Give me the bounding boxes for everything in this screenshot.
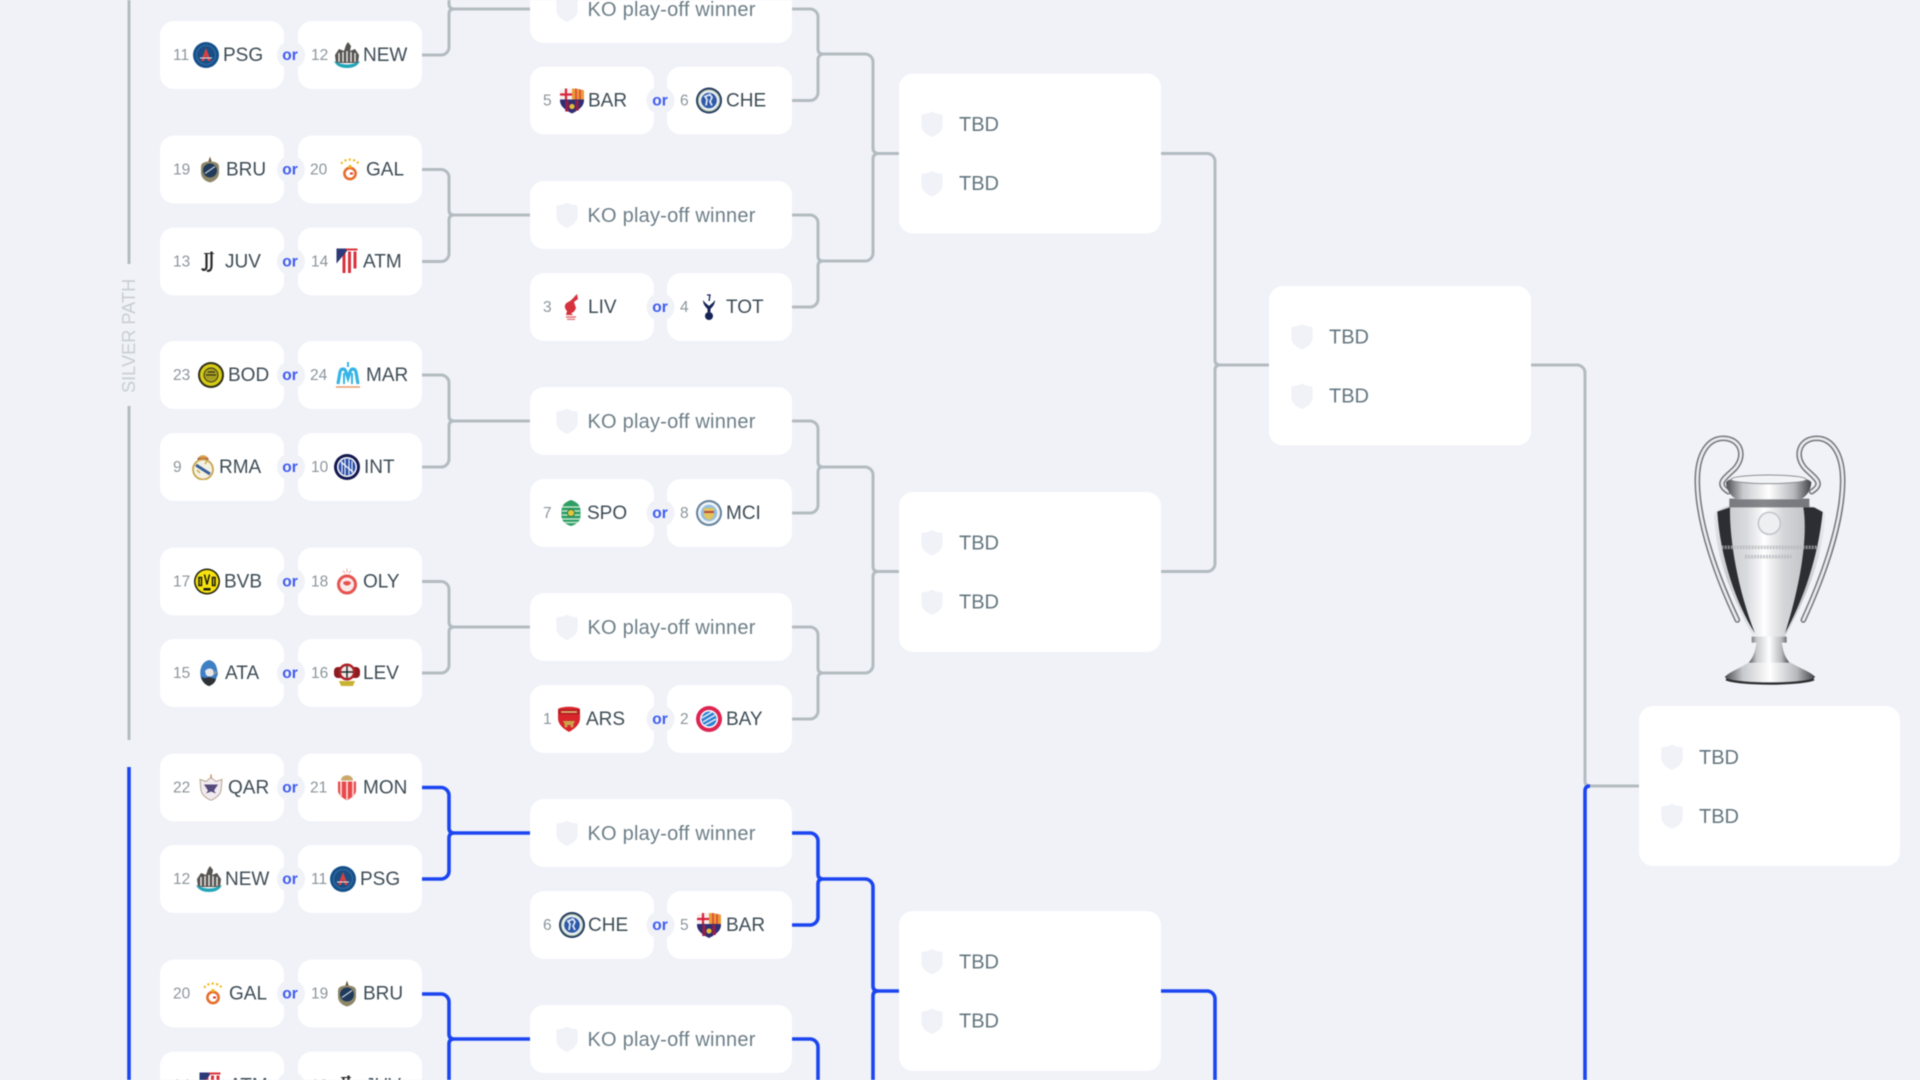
- icon: trophy: [1697, 438, 1843, 684]
- team: GAL: 20: [310, 162, 328, 178]
- team: QAR: QAR: [228, 778, 269, 798]
- team: ATM: [160, 1052, 284, 1080]
- team: MCI: [667, 479, 792, 547]
- team: NEW: 12: [173, 871, 190, 888]
- team: PSG: [298, 845, 422, 913]
- semi-final card: [1269, 286, 1531, 446]
- team: BAR: 5: [543, 92, 552, 110]
- team: MCI: MCI: [726, 503, 761, 524]
- team: BOD: [160, 341, 284, 409]
- team: BRU: [160, 136, 284, 204]
- or badge: [277, 156, 305, 184]
- play-off winner card 6: KO play-off winner: [588, 1029, 756, 1051]
- team: ATM: [298, 228, 422, 296]
- trophy bowl rim: [1726, 476, 1811, 499]
- team: PSG: [160, 21, 284, 89]
- or badge: or: [282, 986, 298, 1002]
- team: GAL: GAL: [366, 160, 404, 180]
- match: GAL or BRU: [160, 960, 422, 1028]
- match: BAR or CHE: [530, 66, 792, 134]
- team: QAR: 22: [173, 780, 190, 796]
- trophy neck: [1729, 499, 1809, 507]
- team: BAR: BAR: [588, 90, 627, 112]
- team: MON: 21: [310, 780, 327, 796]
- or badge: [277, 774, 305, 802]
- or badge: or: [282, 665, 298, 682]
- quarter-final card 1: [899, 74, 1161, 234]
- play-off winner card 5: [530, 799, 792, 867]
- or badge: [646, 499, 674, 527]
- connectors: gold path: [422, 786, 1590, 1080]
- team: CHE: 6: [680, 92, 689, 110]
- team: NEW: [298, 21, 422, 89]
- team: ATM: 14: [311, 254, 329, 270]
- team: BOD: BOD: [228, 365, 269, 386]
- team: OLY: OLY: [363, 572, 400, 592]
- match: QAR or MON: [160, 754, 422, 822]
- team: ATA: 15: [173, 665, 190, 682]
- or badge: or: [282, 871, 298, 888]
- team: BOD: 23: [173, 367, 190, 384]
- or badge: [277, 41, 305, 69]
- team: ARS: 1: [543, 711, 552, 728]
- team: LEV: [298, 639, 422, 707]
- match: ATM or JUV: [160, 1052, 422, 1080]
- play-off winner card 4: KO play-off winner: [588, 617, 756, 639]
- team: LIV: 3: [543, 299, 552, 316]
- team: PSG: PSG: [223, 45, 263, 66]
- trophy stem: [1748, 637, 1790, 663]
- final card: TBD: [1699, 806, 1739, 828]
- team: BRU: BRU: [226, 160, 266, 180]
- play-off winner card 2: [530, 181, 792, 249]
- trophy body: [1714, 499, 1825, 637]
- team: NEW: 12: [311, 47, 328, 64]
- team: GAL: [298, 136, 422, 204]
- match: SPO or MCI: [530, 479, 792, 547]
- team: BAR: [667, 891, 792, 959]
- team: BVB: [160, 548, 284, 616]
- or badge: or: [652, 711, 668, 728]
- team: JUV: [160, 228, 284, 296]
- team: MON: [298, 754, 422, 822]
- or badge: [646, 705, 674, 733]
- match: BVB or OLY: [160, 548, 422, 616]
- match: JUV or ATM: [160, 228, 422, 296]
- or badge: [277, 865, 305, 893]
- silver path label: SILVER PATH: [119, 279, 139, 393]
- trophy base: [1725, 663, 1815, 683]
- or badge: [646, 86, 674, 114]
- team: NEW: NEW: [225, 869, 269, 890]
- team: BAY: [667, 685, 792, 753]
- semi-final card: TBD: [1329, 326, 1369, 348]
- team: MAR: 24: [310, 367, 328, 384]
- team: NEW: NEW: [363, 45, 407, 66]
- team: INT: [298, 433, 422, 501]
- quarter-final card 2: [899, 492, 1161, 652]
- semi-final card: TBD: [1329, 386, 1369, 408]
- match: ARS or BAY: [530, 685, 792, 753]
- or badge: [277, 248, 305, 276]
- or badge: or: [282, 47, 298, 64]
- team: BRU: 19: [311, 986, 328, 1002]
- final card: [1639, 706, 1900, 866]
- team: BVB: BVB: [224, 572, 262, 592]
- play-off winner card 2: KO play-off winner: [588, 205, 756, 227]
- team: TOT: 4: [680, 299, 689, 316]
- match: ATA or LEV: [160, 639, 422, 707]
- or badge: or: [282, 780, 298, 796]
- or badge: or: [282, 162, 298, 178]
- or badge: or: [652, 505, 668, 522]
- team: SPO: SPO: [587, 503, 627, 524]
- or badge: or: [282, 574, 298, 590]
- play-off winner card 6: [530, 1005, 792, 1073]
- team: PSG: PSG: [360, 869, 400, 890]
- team: TOT: TOT: [726, 297, 764, 318]
- team: ATA: ATA: [225, 663, 259, 684]
- team: LIV: [530, 273, 654, 341]
- team: LIV: LIV: [588, 297, 617, 318]
- team: OLY: [298, 548, 422, 616]
- team: LEV: 16: [311, 665, 328, 682]
- team: JUV: [298, 1052, 422, 1080]
- team: MCI: 8: [680, 505, 689, 522]
- quarter-final card 2: TBD: [959, 532, 999, 554]
- or badge: or: [282, 254, 298, 270]
- quarter-final card 3: [899, 911, 1161, 1071]
- team: QAR: [160, 754, 284, 822]
- or badge: or: [652, 917, 668, 934]
- quarter-final card 1: TBD: [959, 173, 999, 195]
- team: ATM: ATM: [363, 252, 402, 272]
- match: RMA or INT: [160, 433, 422, 501]
- or badge: [277, 568, 305, 596]
- team: BAR: 5: [680, 917, 689, 934]
- or badge: [646, 911, 674, 939]
- or badge: [277, 1072, 305, 1080]
- team: RMA: [160, 433, 284, 501]
- or badge: or: [652, 299, 668, 316]
- team: MON: MON: [363, 778, 407, 798]
- team: ARS: ARS: [586, 709, 625, 730]
- trophy medallion: [1758, 512, 1780, 534]
- team: NEW: [160, 845, 284, 913]
- team: MAR: MAR: [366, 365, 408, 386]
- match: NEW or PSG: [160, 845, 422, 913]
- team: RMA: RMA: [219, 457, 262, 478]
- team: OLY: 18: [311, 574, 328, 590]
- team: MAR: [298, 341, 422, 409]
- or badge: [277, 453, 305, 481]
- team: SPO: [530, 479, 654, 547]
- or badge: [646, 293, 674, 321]
- team: INT: INT: [364, 457, 395, 478]
- team: TOT: [667, 273, 792, 341]
- quarter-final card 3: TBD: [959, 1010, 999, 1032]
- team: CHE: CHE: [726, 90, 766, 112]
- team: BAY: 2: [680, 711, 689, 728]
- or badge: [277, 361, 305, 389]
- team: GAL: 20: [173, 986, 191, 1002]
- match: PSG or NEW: [160, 21, 422, 89]
- team: SPO: 7: [543, 505, 552, 522]
- quarter-final card 2: TBD: [959, 592, 999, 614]
- team: BRU: 19: [173, 162, 190, 178]
- final card: TBD: [1699, 747, 1739, 769]
- team: CHE: CHE: [588, 915, 628, 936]
- play-off winner card 4: [530, 593, 792, 661]
- connectors: silver round of 16 to play-off: [422, 0, 530, 673]
- team: PSG: 11: [311, 871, 327, 888]
- team: BVB: 17: [173, 574, 190, 590]
- or badge: [277, 659, 305, 687]
- match: CHE or BAR: [530, 891, 792, 959]
- play-off winner card 3: [530, 387, 792, 455]
- team: LEV: LEV: [363, 663, 399, 684]
- gold path rail: [127, 767, 131, 1080]
- or badge: or: [282, 367, 298, 384]
- team: GAL: [160, 960, 284, 1028]
- team: BAR: [530, 66, 654, 134]
- team: BAR: BAR: [726, 915, 765, 936]
- team: PSG: 11: [173, 47, 189, 64]
- play-off winner card 5: KO play-off winner: [588, 823, 756, 845]
- team: BRU: [298, 960, 422, 1028]
- connectors: silver round of 16 pairs to quarter-finals: [792, 9, 899, 719]
- match: BOD or MAR: [160, 341, 422, 409]
- team: JUV: JUV: [225, 252, 261, 272]
- match: LIV or TOT: [530, 273, 792, 341]
- team: CHE: 6: [543, 917, 552, 934]
- trophy handles: [1697, 438, 1843, 620]
- quarter-final card 1: TBD: [959, 114, 999, 136]
- match: BRU or GAL: [160, 136, 422, 204]
- trophy body shadows: [1717, 507, 1823, 633]
- team: GAL: GAL: [229, 984, 267, 1004]
- trophy engraving: [1722, 547, 1818, 557]
- connectors: silver quarter-finals to semi-final to final: [1161, 154, 1639, 786]
- or badge: or: [652, 92, 668, 110]
- or badge: or: [282, 459, 298, 476]
- team: CHE: [667, 66, 792, 134]
- play-off winner card 3: KO play-off winner: [588, 411, 756, 433]
- team: BRU: BRU: [363, 984, 403, 1004]
- team: ATA: [160, 639, 284, 707]
- team: CHE: [530, 891, 654, 959]
- play-off winner card 1: [530, 0, 792, 43]
- team: JUV: 13: [173, 254, 190, 270]
- team: INT: 10: [311, 459, 329, 476]
- or badge: [277, 980, 305, 1008]
- team: BAY: BAY: [726, 709, 763, 730]
- team: RMA: 9: [173, 459, 182, 476]
- quarter-final card 3: TBD: [959, 952, 999, 974]
- team: ARS: [530, 685, 654, 753]
